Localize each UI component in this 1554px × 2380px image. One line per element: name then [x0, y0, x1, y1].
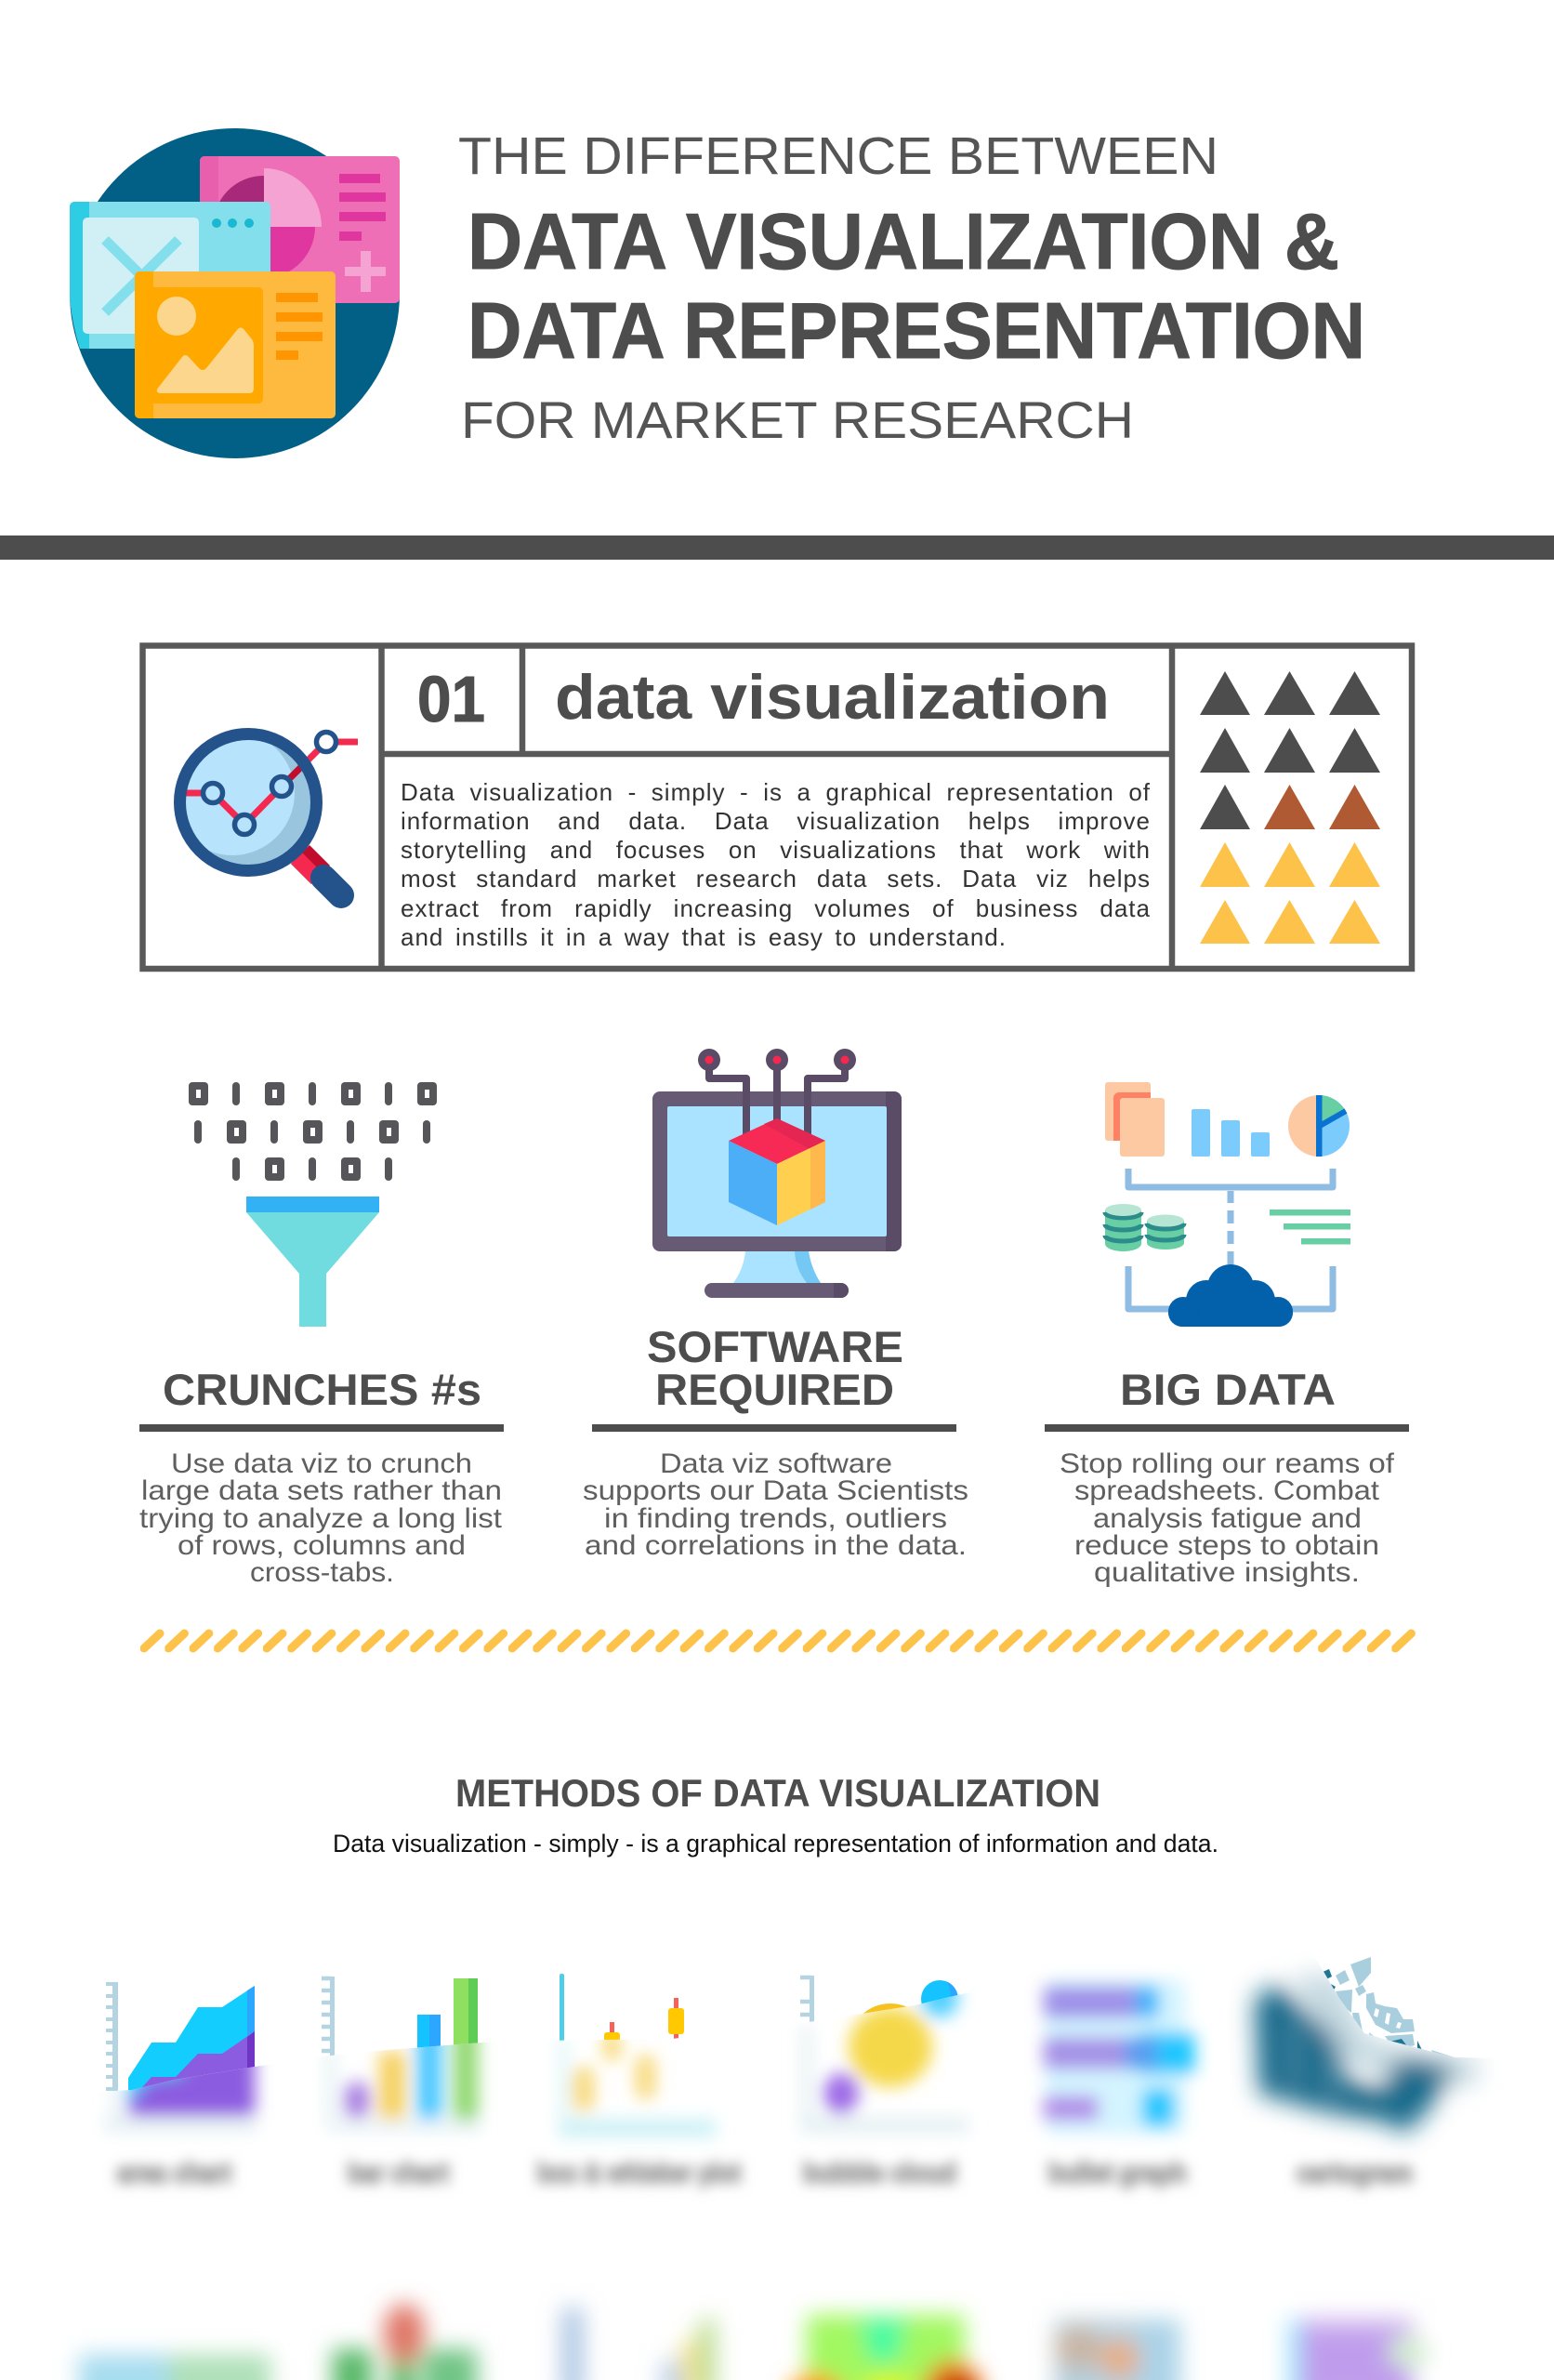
- blurred chart labels: [117, 2158, 1413, 2188]
- text block: data visualization description: information and data. Data visualization helps improve: [401, 807, 1151, 835]
- text block: data visualization description: storytelling and focuses on visualizations that work with: [401, 836, 1151, 864]
- methods heading: METHODS OF DATA VISUALIZATION: [455, 1771, 1100, 1815]
- column: big data: [1045, 1365, 1409, 1588]
- box frame: [143, 645, 1412, 969]
- triangle pictogram: [1200, 671, 1380, 944]
- text block: big data: Stop rolling our reams of: [1060, 1448, 1395, 1479]
- blurred treemap: [1055, 2320, 1180, 2380]
- cyan window: [70, 202, 270, 349]
- text block: big data: analysis fatigue and: [1093, 1503, 1362, 1534]
- heading: software required: REQUIRED: [655, 1365, 894, 1414]
- text block: data visualization description: most standard market research data sets. Data viz helps: [401, 865, 1151, 892]
- heading: big data: BIG DATA: [1120, 1365, 1336, 1414]
- text block: data visualization description: Data visualization - simply - is a graphical representation of: [401, 777, 1151, 805]
- methods subheading: Data visualization - simply - is a graphical representation of information and data.: [333, 1830, 1218, 1858]
- pink chart window: [200, 156, 400, 303]
- blurred flower chart: [333, 2304, 477, 2380]
- blurred multi-bar chart: [562, 2308, 716, 2380]
- text block: big data: reduce steps to obtain: [1074, 1530, 1379, 1561]
- text block: crunches: cross-tabs.: [250, 1557, 394, 1588]
- blurred charts row 2: [79, 2304, 1429, 2380]
- icon: binary digits into funnel: [189, 1082, 437, 1327]
- icon: monitor with cube and circuit nodes: [652, 1049, 902, 1298]
- rule: [1045, 1424, 1409, 1432]
- column: crunches: [139, 1365, 504, 1588]
- blurred chart labels: box & whisker plot: [537, 2158, 741, 2188]
- blurred chart labels: bubble cloud: [803, 2158, 956, 2188]
- orange image window: [135, 271, 336, 418]
- icon: big data network: [1105, 1082, 1350, 1327]
- text block: software: Data viz software: [660, 1448, 892, 1479]
- text block: crunches: trying to analyze a long list: [139, 1503, 503, 1534]
- text block: crunches: of rows, columns and: [178, 1530, 466, 1561]
- blurred waffle chart: [79, 2355, 270, 2380]
- heading: software required: SOFTWARE: [647, 1322, 903, 1371]
- chart: cartogram islands (visible top): [1321, 1957, 1455, 2059]
- text block: crunches: large data sets rather than: [141, 1475, 502, 1506]
- blurred bubble cloud: [801, 1980, 968, 2133]
- text block: crunches: [139, 1448, 503, 1588]
- blurred chart labels: bar chart: [348, 2158, 449, 2188]
- rule: [139, 1424, 504, 1432]
- title line 2: DATA VISUALIZATION &: [468, 198, 1339, 286]
- hatched yellow divider: [140, 1622, 1416, 1659]
- column: software required: [583, 1322, 968, 1561]
- section number: 01: [417, 663, 485, 735]
- text block: software: supports our Data Scientists: [583, 1475, 968, 1506]
- title line 4: FOR MARKET RESEARCH: [461, 390, 1134, 449]
- blurred heat map: [786, 2315, 982, 2380]
- panel: 01 data visualization box: [143, 645, 1412, 969]
- blurred area chart: [103, 2065, 268, 2136]
- blurred chart labels: cartogram: [1297, 2158, 1413, 2188]
- chart: box and whisker plot (visible top): [560, 1974, 684, 2060]
- icon: magnifying glass with line chart: [170, 731, 358, 895]
- blurred bullet graph: [1044, 1980, 1194, 2134]
- blurred charts and labels: [79, 1976, 1478, 2380]
- title: [458, 126, 1365, 449]
- white mask behind blurred content: [0, 1952, 1554, 2380]
- text block: software: in finding trends, outliers: [604, 1503, 947, 1534]
- heading: crunches: CRUNCHES #s: [163, 1365, 481, 1414]
- text block: big data: [1060, 1448, 1395, 1588]
- rule: [592, 1424, 956, 1432]
- blurred bar chart: [323, 2043, 490, 2136]
- chart: bar chart (visible top): [322, 1977, 478, 2080]
- blurred purple chart: [1287, 2317, 1429, 2380]
- blurred chart labels: bullet graph: [1048, 2158, 1187, 2188]
- text block: crunches: Use data viz to crunch: [171, 1448, 472, 1479]
- text block: data visualization description: and instills it in a way that is easy to understand.: [401, 923, 1007, 951]
- chart: bubble cloud (visible top): [800, 1976, 958, 2087]
- blurred charts row 1: [104, 1978, 1194, 2138]
- blurred cartogram: [1255, 1976, 1478, 2134]
- text block: software: [583, 1448, 968, 1561]
- section heading: data visualization: [555, 662, 1110, 733]
- blurred chart labels: area chart: [117, 2158, 231, 2188]
- text block: data visualization description: [401, 777, 1151, 951]
- text block: big data: spreadsheets. Combat: [1074, 1475, 1380, 1506]
- blurred box and whisker plot: [560, 2032, 716, 2138]
- header divider bar: [0, 536, 1554, 560]
- text block: big data: qualitative insights.: [1094, 1557, 1360, 1588]
- icon circle: [70, 128, 400, 458]
- heading: software required: [647, 1322, 903, 1414]
- text block: data visualization description: extract from rapidly increasing volumes of business data: [401, 894, 1151, 922]
- header icon: overlapping chart windows on a teal circle: [70, 128, 400, 458]
- text block: software: and correlations in the data.: [585, 1530, 967, 1561]
- chart: area chart (visible top): [106, 1982, 255, 2120]
- title line 1: THE DIFFERENCE BETWEEN: [458, 126, 1218, 186]
- title line 3: DATA REPRESENTATION: [468, 287, 1365, 376]
